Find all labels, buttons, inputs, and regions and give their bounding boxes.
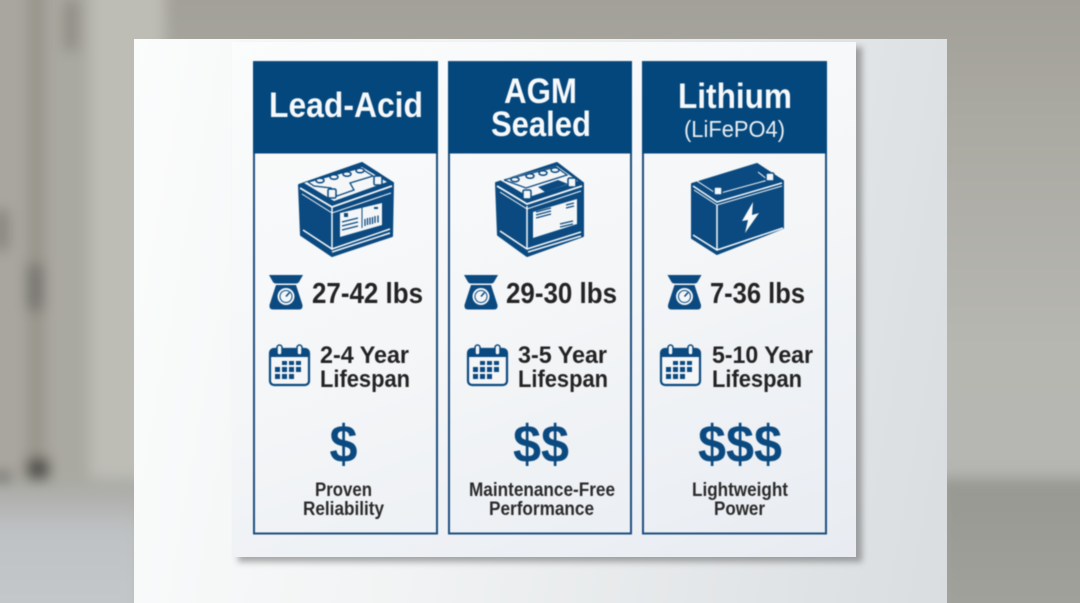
icon: lead-acid battery xyxy=(299,163,393,256)
header: Lithium xyxy=(642,62,827,154)
column frame xyxy=(449,62,631,534)
icon: calendar xyxy=(468,345,507,385)
benefit text xyxy=(692,480,789,520)
cost: one dollar: $ xyxy=(330,415,358,474)
front card xyxy=(232,42,856,557)
lifespan text: 2-4 Year xyxy=(320,342,409,369)
weight text: 27-42 lbs xyxy=(312,278,423,310)
benefit text: Power xyxy=(714,499,766,520)
benefit text: Proven xyxy=(315,480,372,501)
icon: calendar xyxy=(270,345,309,385)
header: Lithium: (LiFePO4) xyxy=(684,116,785,142)
icon: calendar xyxy=(661,345,700,385)
lifespan text: 5-10 Year xyxy=(712,342,813,369)
header: AGM Sealed: Sealed xyxy=(491,105,591,144)
icon: lithium battery xyxy=(692,164,783,254)
cost: two dollars: $$ xyxy=(513,415,569,474)
weight text: 7-36 lbs xyxy=(710,278,805,310)
header: AGM Sealed xyxy=(448,62,632,154)
header: Lead-Acid xyxy=(253,62,438,154)
header: Lithium: Lithium xyxy=(678,77,792,116)
icon: scale xyxy=(269,275,303,310)
column frame xyxy=(643,62,826,534)
cost: three dollars: $$$ xyxy=(698,415,782,474)
lifespan text: Lifespan xyxy=(712,366,802,393)
icon: scale xyxy=(464,275,498,310)
panel: Lead-Acid xyxy=(253,62,438,534)
benefit text: Lightweight xyxy=(692,480,789,501)
weight text: 29-30 lbs xyxy=(506,278,617,310)
lifespan text xyxy=(518,342,608,393)
icon: AGM battery xyxy=(496,163,583,256)
benefit text: Performance xyxy=(489,499,594,520)
benefit text: Reliability xyxy=(303,499,384,520)
header: Lead-Acid: Lead-Acid xyxy=(269,86,423,125)
benefit text xyxy=(303,480,384,520)
column frame xyxy=(254,62,437,534)
benefit text xyxy=(469,480,615,520)
back white panel xyxy=(134,39,947,603)
panel: Lithium xyxy=(642,62,827,534)
header: AGM Sealed: AGM xyxy=(504,72,577,111)
panel: AGM Sealed xyxy=(448,62,632,534)
lifespan text xyxy=(320,342,410,393)
lifespan text xyxy=(712,342,813,393)
lifespan text: Lifespan xyxy=(320,366,410,393)
lifespan text: 3-5 Year xyxy=(518,342,607,369)
benefit text: Maintenance-Free xyxy=(469,480,615,501)
icon: scale xyxy=(668,275,702,310)
lifespan text: Lifespan xyxy=(518,366,608,393)
